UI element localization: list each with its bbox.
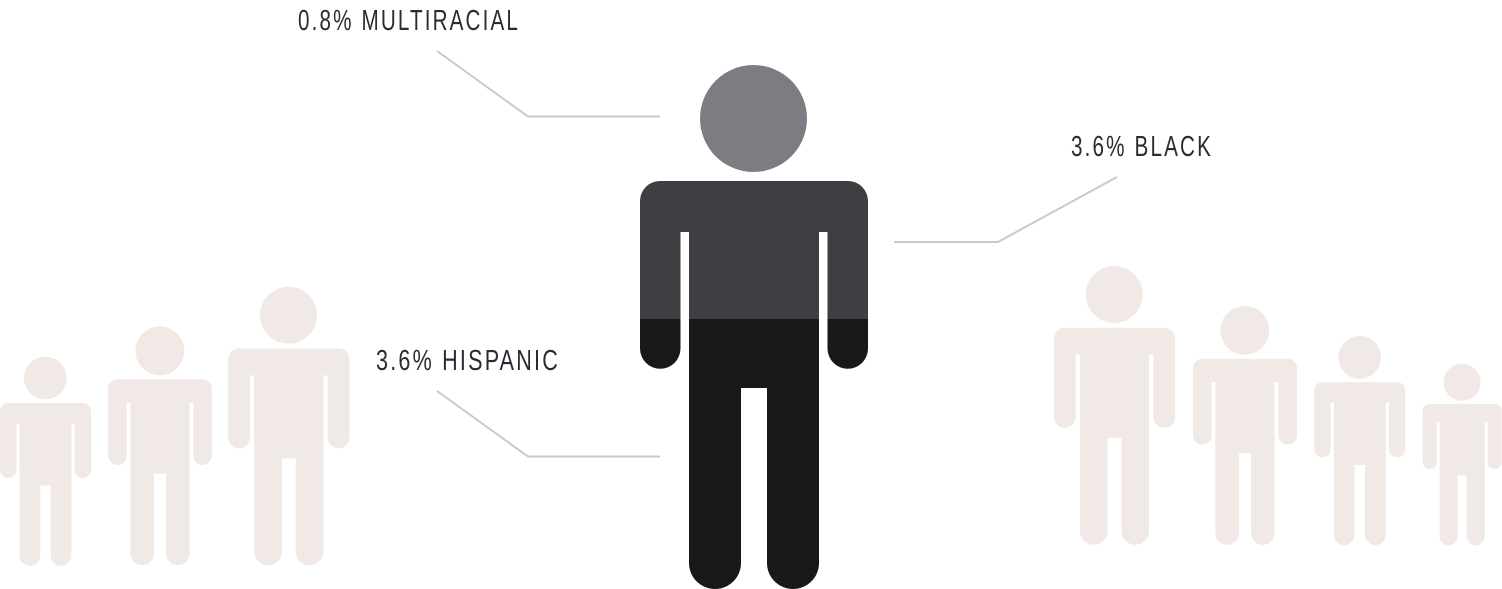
- label: hispanic: 3.6% HISPANIC: [376, 345, 560, 377]
- label: multiracial: 0.8% MULTIRACIAL: [298, 5, 520, 37]
- faded figure: right 1: [1054, 266, 1175, 545]
- label: black: 3.6% BLACK: [1071, 131, 1213, 163]
- central figure, segmented by share: [640, 65, 868, 589]
- torso segment: black: [640, 181, 868, 319]
- faded figure: right 3: [1314, 336, 1405, 545]
- head segment: multiracial: [700, 65, 807, 172]
- faded figure: left 3: [228, 287, 349, 565]
- leader line: black: [894, 177, 1117, 242]
- faded figure: left 2: [108, 326, 212, 565]
- leader line: hispanic: [437, 391, 660, 456]
- faded figure: left 1: [0, 357, 91, 566]
- faded figure: right 2: [1193, 306, 1297, 545]
- faded figure: right 4: [1423, 364, 1502, 545]
- lower body segment: hispanic: [640, 319, 868, 589]
- leader line: multiracial: [437, 51, 660, 116]
